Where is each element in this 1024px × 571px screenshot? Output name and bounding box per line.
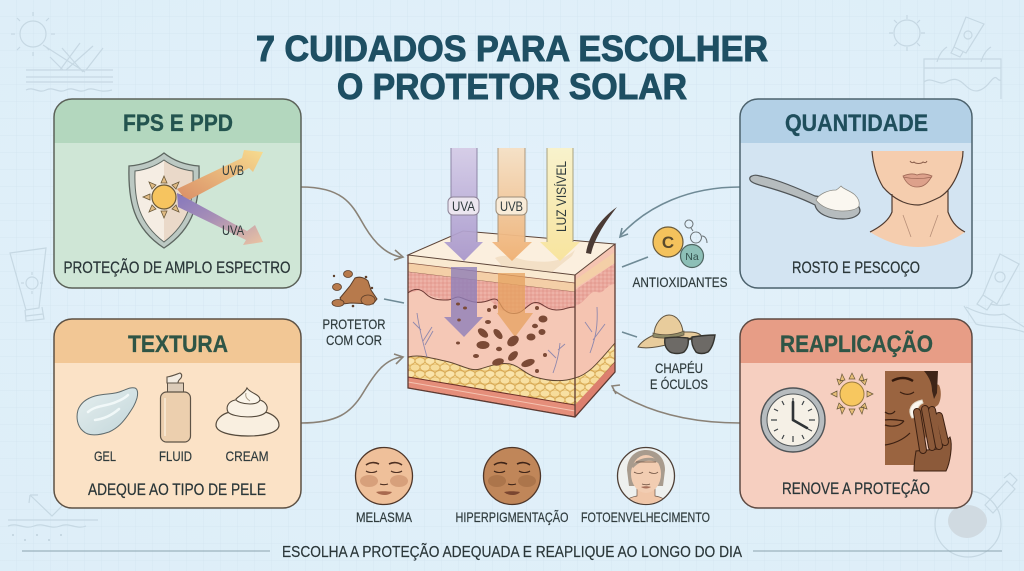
panel: FPS e PPD [54,99,301,288]
decorative icon: dropper over a dish, bottom right [935,473,1017,557]
heading: FPS e PPD: FPS E PPD [123,110,233,137]
label: cream: CREAM [226,448,268,464]
label: antioxidantes: ANTIOXIDANTES [632,274,728,290]
arrow: UVB [177,150,263,201]
label: chapéu e óculos: CHAPÉU [655,360,703,376]
arrow: UVA [177,193,263,245]
text: proteção de amplo espectro: PROTEÇÃO DE AMPLO ESPECTRO [64,258,290,277]
lower arrow: UVA [444,267,483,337]
icon: shield with sun [129,153,199,248]
decorative icon: sun reflecting on skin, top left [11,12,113,91]
upper arrow: UVA [444,148,483,261]
upper arrow: luz visível: LUZ VISÍVEL [553,161,569,232]
heading: Textura: TEXTURA [128,331,228,358]
hair [586,207,617,254]
icon: antioxidants: Na [685,251,699,263]
icon: spoon with cream [750,175,860,219]
panel: Quantidade [740,99,972,288]
icon: face and neck [870,151,965,247]
icon: photoaging face [618,448,674,505]
decorative icon: sunscreen tube, left [10,248,46,321]
icon: antioxidants: C [662,233,674,252]
upper arrow: UVB: UVB [500,198,523,214]
label: chapéu e óculos [650,360,708,392]
decorative icon: arrow and skin, bottom left [8,495,98,540]
heading: Reaplicação: REAPLICAÇÃO [780,330,933,358]
text: rosto e pescoço: ROSTO E PESCOÇO [792,258,920,277]
front face layers [408,250,578,420]
title: 7 CUIDADOS PARA ESCOLHER [256,28,768,69]
title: O PROTETOR SOLAR [337,66,687,107]
panel: Textura [54,319,301,508]
label: hiperpigmentação: HIPERPIGMENTAÇÃO [456,509,569,525]
icon: hat and sunglasses [638,315,715,354]
skin diagram [408,148,620,420]
decorative icon: sun, tube and skin, top right [889,15,1001,99]
icon: clock [761,388,825,452]
label: melasma: MELASMA [356,509,413,525]
label: fotoenvelhecimento: FOTOENVELHECIMENTO [581,509,710,525]
icon: sun [831,373,873,415]
upper arrow: UVA: UVA [452,198,476,214]
icon: antioxidants [653,220,707,268]
label: protetor com cor: COM COR [326,332,382,348]
footer text: ESCOLHA A PROTEÇÃO ADEQUADA E REAPLIQUE AO LONGO DO DIA [282,541,742,561]
label: protetor com cor: PROTETOR [322,316,386,332]
footer lines [22,550,1002,552]
icon: fluid bottle [160,373,190,442]
arrow: UVA: UVA [222,222,245,238]
upper arrow: UVB [492,148,532,261]
icon: face applying sunscreen [885,371,951,471]
icon: cream [216,388,279,436]
label: fluid: FLUID [159,448,192,464]
lower arrow: UVB [497,273,533,337]
side face [576,245,614,416]
label: chapéu e óculos: E ÓCULOS [650,376,708,392]
icon: tinted sunscreen pigment [332,270,377,307]
decorative icon: tube and hand, right [964,254,1024,332]
panel: Reaplicação [740,319,972,508]
title [256,28,768,107]
heading: Quantidade: QUANTIDADE [785,110,928,137]
icon: gel [77,388,138,435]
icon: melasma face [356,448,412,504]
pigment spots [456,302,548,373]
arrow: UVB: UVB [222,162,244,178]
text: renove a proteção: RENOVE A PROTEÇÃO [782,479,930,498]
label: gel: GEL [94,448,116,464]
label: protetor com cor [322,316,386,348]
top face [408,231,615,275]
text: adeque ao tipo de pele: ADEQUE AO TIPO DE PELE [88,480,266,499]
arrows: connectors from panels to skin diagram [301,187,740,423]
icon: hyperpigmentation face [484,448,540,504]
upper arrow: luz visível [540,148,580,261]
